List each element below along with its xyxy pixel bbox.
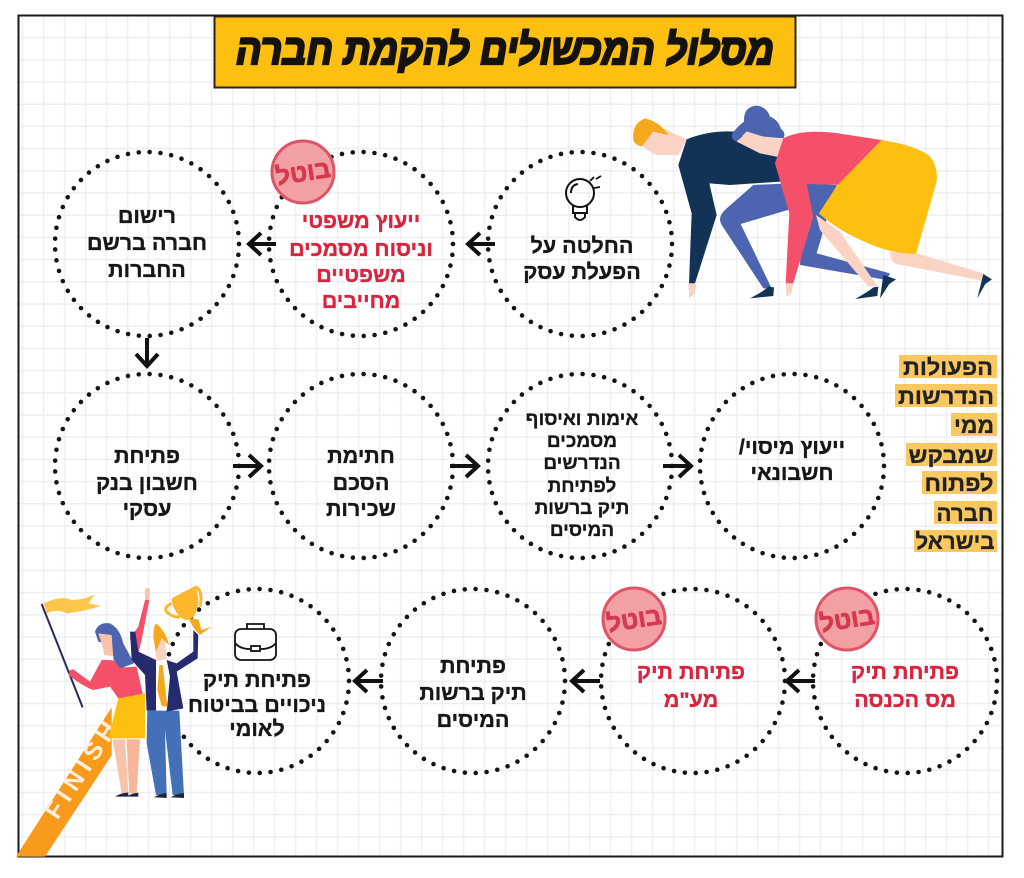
- step 6: documents: הנדרשים: [543, 453, 621, 474]
- step 11: social security file: [188, 624, 326, 741]
- stamp: cancelled: [816, 588, 878, 650]
- finish ribbon: FINISH: [40, 717, 123, 824]
- step 8: income tax file, unnecessary: [813, 588, 997, 773]
- arrow: [355, 670, 383, 692]
- arrow: [663, 455, 691, 477]
- icon: light bulb: [566, 176, 601, 220]
- side note: required actions: הנדרשות: [898, 384, 994, 409]
- trophy: [166, 586, 212, 635]
- step 6: documents: [488, 374, 672, 558]
- woman's front leg: [816, 215, 877, 287]
- step 2: legal consulting, unnecessary: ייעוץ משפטי: [302, 209, 420, 233]
- step 3: company registration: [55, 152, 239, 336]
- step 11: social security file: פתיחת תיק: [203, 668, 311, 692]
- man's shoes: [750, 287, 774, 298]
- finish ribbon: [16, 707, 123, 857]
- step 1: decision: [488, 152, 672, 336]
- step 10: tax authority file: תיק ברשות: [419, 681, 527, 705]
- icon: briefcase: [235, 624, 276, 660]
- woman's hair: [732, 106, 785, 142]
- step 6: documents: לפתיחת: [548, 476, 616, 497]
- woman's back leg: [890, 252, 983, 281]
- side note: required actions: לפתוח: [924, 471, 994, 496]
- step 6: documents: אימות ואיסוף: [526, 409, 638, 430]
- side note: required actions: [895, 355, 997, 554]
- title banner: מסלול המכשולים להקמת חברה: [236, 26, 774, 73]
- side note: required actions: חברה: [936, 501, 994, 526]
- step 8: income tax file, unnecessary: מס הכנסה: [854, 688, 956, 712]
- step 7: tax consulting: [700, 374, 884, 558]
- step 9: VAT file, unnecessary: [601, 588, 785, 773]
- illustration: finish line winners: [42, 586, 212, 798]
- step 10: tax authority file: המיסים: [437, 708, 509, 732]
- side note: required actions: הפעולות: [903, 355, 993, 380]
- title banner: [214, 16, 796, 88]
- step 4: bank account: [55, 374, 239, 558]
- arrow: [249, 233, 276, 255]
- arrow: [572, 670, 600, 692]
- man's navy shirt: [678, 131, 780, 283]
- step 3: company registration: החברות: [108, 258, 186, 282]
- step 1: decision: הפעלת עסק: [523, 260, 641, 284]
- step 3: company registration: חברה ברשם: [87, 231, 207, 255]
- man's skin: [638, 128, 687, 155]
- step 10: tax authority file: [381, 589, 565, 773]
- side note: required actions: ממי: [954, 413, 994, 438]
- woman's shoes: [855, 287, 878, 299]
- step 5: rental contract: [269, 374, 453, 558]
- man's hair: [633, 118, 668, 147]
- step 6: documents: מסמכים: [547, 431, 617, 452]
- stamp: cancelled: בוטל: [605, 602, 664, 638]
- step 11: social security file: לאומי: [229, 717, 285, 741]
- step 6: documents: המיסים: [550, 520, 614, 541]
- step 2: legal consulting, unnecessary: מחייבים: [322, 289, 400, 313]
- step 11: social security file: ניכויים בביטוח: [188, 693, 326, 717]
- step 7: tax consulting: ייעוץ מיסוי/: [739, 435, 845, 459]
- arrow: [450, 455, 478, 477]
- step 3: company registration: רישום: [118, 204, 176, 228]
- woman's hand: [786, 283, 793, 297]
- illustration: two runners at the start: [633, 106, 992, 299]
- step 5: rental contract: הסכם: [333, 471, 389, 495]
- arrow: [787, 670, 815, 692]
- step 4: bank account: פתיחת: [114, 444, 180, 468]
- woman's face: [737, 132, 785, 157]
- step 4: bank account: עסקי: [123, 497, 171, 521]
- stamp: cancelled: [603, 588, 665, 650]
- step 10: tax authority file: פתיחת: [440, 654, 506, 678]
- flag: [42, 594, 101, 707]
- step 9: VAT file, unnecessary: מע"מ: [664, 688, 718, 712]
- woman: [68, 588, 150, 797]
- step 9: VAT file, unnecessary: פתיחת תיק: [637, 660, 745, 684]
- arrow down: [136, 338, 158, 366]
- side note: required actions: בישראל: [916, 529, 994, 554]
- stamp: cancelled: בוטל: [818, 602, 877, 638]
- stamp: cancelled: [272, 141, 334, 203]
- man: [130, 623, 198, 798]
- step 2: legal consulting, unnecessary: וניסוח מסמכים: [289, 237, 433, 261]
- step 11 ring: [165, 589, 349, 773]
- man's back leg: [800, 183, 890, 280]
- step 8: income tax file, unnecessary: פתיחת תיק: [851, 660, 959, 684]
- man's front leg: [720, 183, 793, 288]
- step 1: decision: החלטה על: [531, 234, 633, 258]
- woman's red top: [775, 132, 882, 283]
- step 2: legal consulting, unnecessary: [269, 141, 453, 336]
- step 5: rental contract: שכירות: [326, 497, 396, 521]
- step 2: legal consulting, unnecessary: משפטיים: [316, 263, 406, 287]
- arrow: [468, 233, 495, 255]
- arrow: [233, 455, 261, 477]
- step 7: tax consulting: חשבונאי: [750, 461, 834, 485]
- step 4: bank account: חשבון בנק: [96, 471, 198, 495]
- woman's yellow skirt: [819, 140, 937, 254]
- step 6: documents: תיק ברשות: [535, 498, 629, 519]
- step 5: rental contract: חתימת: [327, 444, 395, 468]
- stamp: cancelled: בוטל: [274, 155, 333, 191]
- side note: required actions: שמבקש: [908, 443, 994, 468]
